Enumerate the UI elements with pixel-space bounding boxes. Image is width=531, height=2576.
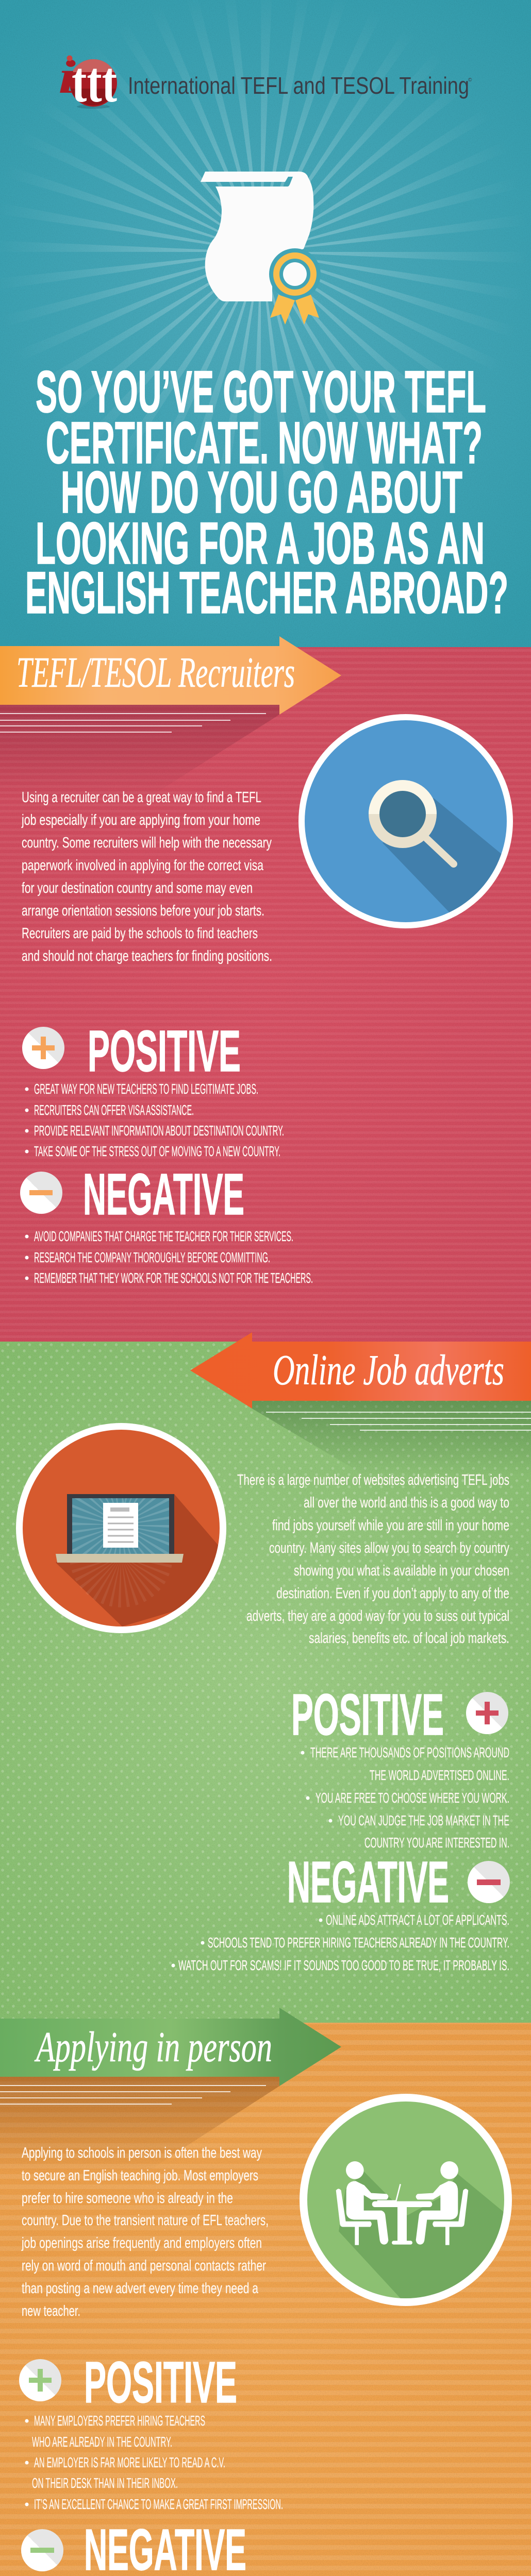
icon: certificate scroll with seal [201,172,321,325]
icon: plus [22,1027,64,1069]
text: recruiters introduction: Using a recruiter can be a great way to find a TEFL [22,789,261,806]
list: positive points: WHO ARE ALREADY IN THE COUNTRY. [32,2434,172,2450]
list: negative points: AVOID COMPANIES THAT CHARGE THE TEACHER FOR THEIR SERVICES. [34,1228,293,1244]
panel: online job adverts [0,1332,531,2023]
text: recruiters introduction: and should not charge teachers for finding positions. [22,948,272,964]
list: positive points [25,2413,283,2512]
list: positive points [301,1744,509,1851]
text: applying in person introduction: than posting a new advert every time they need a [22,2280,259,2297]
banner: TEFL/TESOL Recruiters [0,636,341,732]
heading: negative: NEGATIVE [83,1162,244,1227]
panel: applying in person [0,2008,531,2576]
list: positive points: RECRUITERS CAN OFFER VISA ASSISTANCE. [34,1102,194,1118]
list: positive points: ON THEIR DESK THAN IN THEIR INBOX. [32,2475,178,2491]
logo: ITTT: i [58,50,76,103]
text: recruiters introduction: for your destination country and some may even [22,880,253,896]
text: recruiters introduction: job especially if you are applying from your home [21,812,260,828]
icon: interview at table in circle [300,2094,512,2306]
banner: Applying in person: Applying in person [34,2023,272,2071]
logo: ITTT [58,50,472,114]
list: positive points: GREAT WAY FOR NEW TEACHERS TO FIND LEGITIMATE JOBS. [34,1081,258,1097]
list: positive points: MANY EMPLOYERS PREFER HIRING TEACHERS [34,2413,205,2429]
text: recruiters introduction: Recruiters are paid by the schools to find teachers [22,925,258,942]
list: negative points [25,1228,313,1286]
text: recruiters introduction: country. Some recruiters will help with the necessary [22,835,272,851]
panel: TEFL/TESOL recruiters [0,636,531,1342]
banner: TEFL/TESOL Recruiters: TEFL/TESOL Recruiters [16,649,295,697]
list: positive points: IT’S AN EXCELLENT CHANCE TO MAKE A GREAT FIRST IMPRESSION. [34,2496,283,2512]
title [25,359,508,626]
icon: laptop in circle [16,1423,226,1633]
heading: positive: POSITIVE [88,1019,241,1083]
icon: minus [21,2529,63,2571]
icon: minus [20,1172,62,1214]
text: recruiters introduction: arrange orientation sessions before your job starts. [22,903,264,919]
list: positive points: PROVIDE RELEVANT INFORMATION ABOUT DESTINATION COUNTRY. [34,1123,284,1139]
icon: plus [466,1692,508,1734]
list: positive points [25,1081,284,1159]
text: applying in person introduction: prefer to hire someone who is already in the [22,2190,233,2207]
text: applying in person introduction [21,2145,269,2319]
text: applying in person introduction: Applying to schools in person is often the best way [22,2145,262,2161]
list: negative points [171,1912,509,1973]
logo: ITTT: International TEFL and TESOL Training [128,72,469,99]
icon: magnifying glass in circle [298,714,516,928]
banner: Online Job adverts [190,1332,531,1430]
text: applying in person introduction: to secure an English teaching job. Most employers [22,2167,258,2184]
text: online adverts introduction [237,1472,509,1647]
panel: hero header [0,0,531,649]
text: applying in person introduction: rely on word of mouth and personal contacts rather [22,2258,266,2274]
icon: plus [19,2359,61,2401]
logo: ITTT: © [468,77,472,83]
list: positive points: AN EMPLOYER IS FAR MORE LIKELY TO READ A C.V. [34,2454,225,2470]
list: negative points: RESEARCH THE COMPANY THOROUGHLY BEFORE COMMITTING. [34,1249,270,1265]
text: recruiters introduction [21,789,272,964]
text: applying in person introduction: new teacher. [22,2303,80,2319]
text: recruiters introduction: paperwork involved in applying for the correct visa [22,857,264,874]
heading: positive: POSITIVE [84,2350,237,2415]
icon: minus [468,1861,510,1903]
logo: ITTT: ttt [72,50,117,114]
list: positive points: TAKE SOME OF THE STRESS OUT OF MOVING TO A NEW COUNTRY. [34,1143,280,1159]
text: applying in person introduction: country. Due to the transient nature of EFL teachers, [22,2212,269,2229]
banner: Applying in person [0,2008,341,2104]
text: applying in person introduction: job openings arise frequently and employers often [21,2235,262,2251]
